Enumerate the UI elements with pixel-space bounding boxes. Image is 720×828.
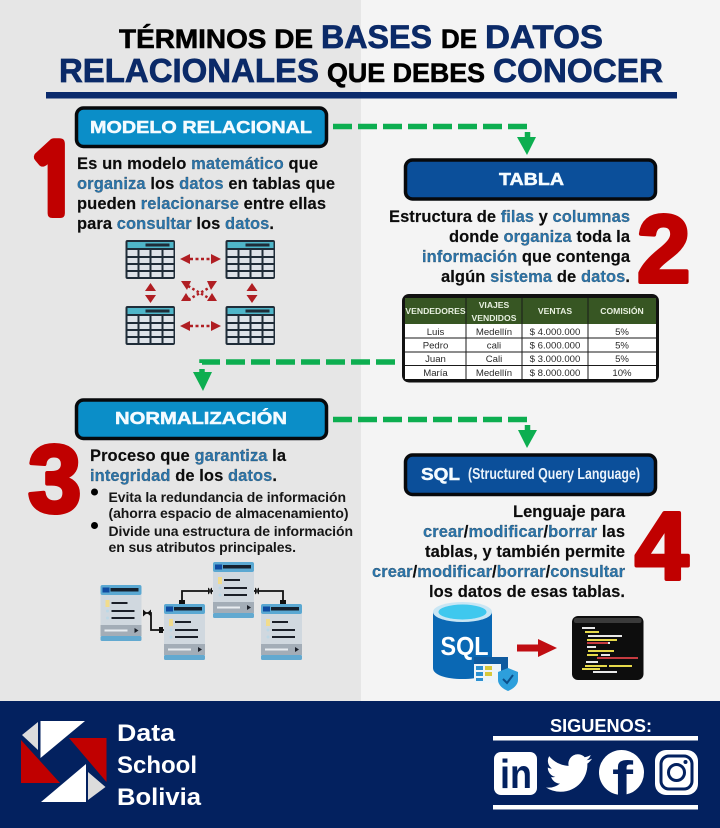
heading: modelo relacional: MODELO RELACIONAL: [90, 117, 312, 137]
icon: entity card 4: [261, 604, 302, 660]
text block: definition 4: Lenguaje para: [513, 503, 626, 521]
brand name: Data: [117, 720, 176, 747]
panel: modelo relacional: [25, 108, 335, 344]
title: TÉRMINOS DE: [119, 23, 313, 54]
background: left panel: [0, 0, 361, 701]
title: BASES: [321, 19, 432, 55]
brand name: School: [117, 752, 197, 779]
table rows: Pedro: [423, 340, 448, 352]
panel: tabla: [389, 160, 690, 382]
bullet list: (ahorra espacio de almacenamiento): [108, 505, 348, 521]
table rows: cali: [487, 340, 501, 352]
number 3: 3: [28, 426, 81, 533]
table header: [405, 300, 644, 323]
table rows: María: [423, 368, 448, 379]
brand name: [117, 720, 202, 811]
text block: definition 1: organiza los datos en tablas que: [77, 175, 335, 193]
text block: definition 4: los datos de esas tablas.: [429, 583, 625, 601]
diagram: related tables: [126, 241, 274, 344]
title underline: [46, 92, 677, 98]
heading: normalizacion: [76, 400, 326, 438]
table rows: $ 4.000.000: [530, 327, 580, 338]
connector ends: [143, 588, 286, 633]
table header: VENDIDOS: [472, 313, 517, 323]
brand name: Bolivia: [117, 784, 202, 811]
text block: definition 2: [389, 208, 631, 286]
arrow: sql to code: [517, 639, 557, 657]
table rows: 5%: [615, 354, 629, 365]
table rows: Medellín: [476, 368, 512, 379]
text block: definition 1: [77, 155, 335, 233]
text block: definition 4: [372, 503, 626, 601]
text block: definition 2: donde organiza toda la: [449, 228, 631, 246]
table rows: $ 6.000.000: [530, 340, 580, 352]
icon: table bottom right: [226, 307, 274, 344]
text block: definition 2: Estructura de filas y columnas: [389, 208, 630, 226]
table rows: $ 8.000.000: [530, 368, 580, 379]
icon: facebook: [599, 750, 644, 806]
bullet list: en sus atributos principales.: [108, 539, 296, 555]
text block: definition 4: crear/modificar/borrar/consultar: [372, 563, 626, 581]
arrow: normalizacion to sql: [333, 420, 537, 448]
panel: normalizacion: [28, 400, 353, 660]
logo: data school bolivia: [21, 721, 106, 802]
table rows: 5%: [615, 327, 629, 338]
heading: normalizacion: NORMALIZACIÓN: [115, 407, 287, 428]
icon: twitter: [546, 754, 592, 792]
text block: definition 4: tablas, y también permite: [425, 543, 625, 561]
bullet list: Divide una estructura de información: [108, 523, 353, 539]
text block: definition 1: para consultar los datos.: [77, 215, 274, 233]
diagram: normalized entities: [100, 562, 302, 660]
icon: code editor: [572, 616, 644, 680]
arrows: relations: [145, 254, 258, 331]
title: DATOS: [485, 19, 603, 55]
text block: definition 2: algún sistema de datos.: [441, 268, 630, 286]
heading: sql: [406, 455, 656, 494]
text block: definition 1: pueden relacionarse entre ellas: [77, 195, 326, 213]
social bottom rule: [493, 805, 698, 810]
bullet list: Evita la redundancia de información: [108, 489, 346, 505]
icon: table top right: [226, 241, 274, 278]
social top rule: [493, 736, 698, 740]
table header: VENDEDORES: [405, 306, 466, 316]
text block: definition 3: [90, 447, 287, 485]
arrow: tabla to normalizacion: [193, 362, 395, 391]
table rows: Medellín: [476, 327, 512, 338]
table rows: Juan: [425, 354, 446, 365]
social heading: SIGUENOS:: [550, 715, 652, 736]
heading: tabla: TABLA: [499, 169, 564, 189]
table header: COMISIÓN: [600, 305, 644, 316]
table rows: 5%: [615, 340, 629, 352]
title: RELACIONALES: [59, 52, 319, 89]
heading: tabla: [406, 160, 656, 199]
heading: sql: SQL: [421, 464, 460, 484]
number 2: 2: [637, 196, 690, 303]
icon: table bottom left: [126, 307, 174, 344]
icon: sql database: SQL: [440, 631, 489, 661]
icon: sql database: [433, 602, 518, 691]
table rows: Cali: [486, 354, 502, 365]
text block: definition 3: Proceso que garantiza la: [90, 447, 287, 465]
background: right panel: [361, 0, 720, 701]
table rows: 10%: [612, 368, 632, 379]
panel: sql: [372, 455, 688, 691]
icon: instagram: [655, 750, 698, 795]
title: CONOCER: [493, 52, 663, 89]
table rows: [423, 327, 632, 379]
number 1: 1: [25, 134, 83, 229]
text block: definition 1: Es un modelo matemático que: [77, 155, 318, 173]
icon: linkedin: in: [500, 751, 532, 797]
text block: definition 4: crear/modificar/borrar las: [423, 523, 625, 541]
title: QUE DEBES: [327, 58, 485, 88]
data table: [402, 294, 659, 382]
icon: table top left: [126, 241, 174, 278]
icon: entity card 2: [164, 604, 205, 660]
heading: modelo relacional: [76, 108, 326, 146]
icon: facebook: f: [612, 753, 634, 806]
icon: entity card 3: [213, 562, 254, 618]
title: DE: [441, 24, 477, 54]
footer: [0, 701, 720, 828]
bullet list: [91, 488, 353, 555]
heading: sql: (Structured Query Language): [468, 466, 640, 483]
title: [59, 19, 663, 89]
table rows: $ 3.000.000: [530, 354, 580, 365]
arrow: modelo relacional to tabla: [333, 126, 536, 155]
number 4: 4: [635, 493, 688, 600]
table header: VIAJES: [479, 300, 510, 310]
text block: definition 2: información que contenga: [422, 248, 631, 266]
connectors: [143, 591, 283, 630]
icon: entity card 1: [100, 585, 142, 641]
table rows: Luis: [427, 327, 444, 338]
text block: definition 3: integridad de los datos.: [90, 467, 277, 485]
table header: VENTAS: [538, 306, 572, 316]
